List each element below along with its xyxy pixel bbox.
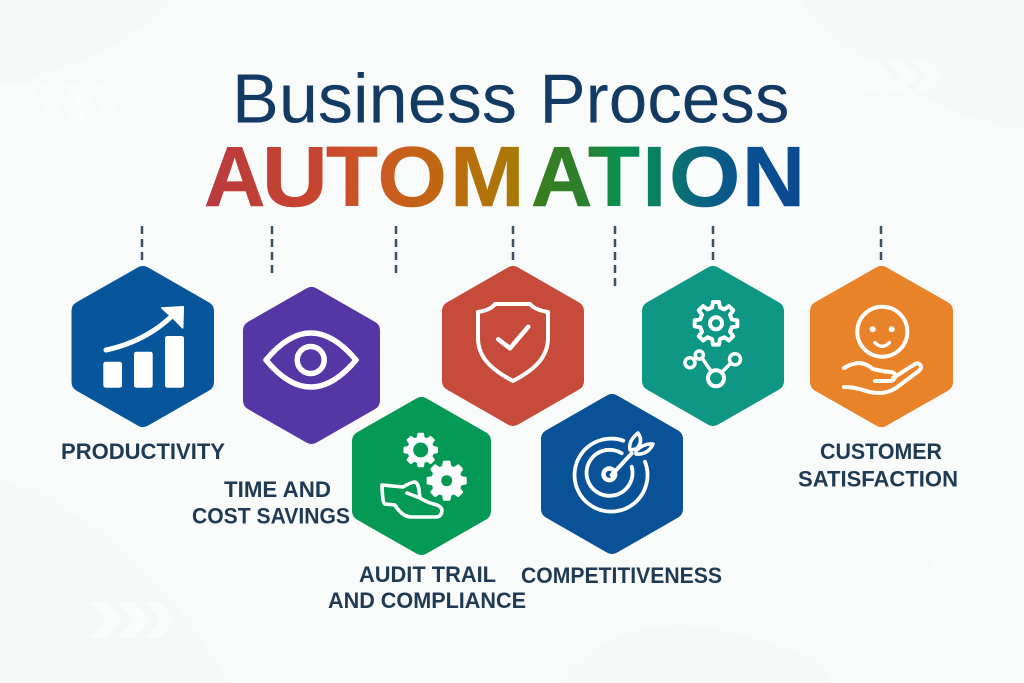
hexagon: audit trail	[362, 407, 481, 545]
title: AUTOMATION: A	[204, 130, 265, 225]
icon: shield with check	[478, 304, 548, 381]
label: customer satisfaction: CUSTOMER	[820, 439, 942, 464]
hexagon: competitiveness	[551, 404, 673, 544]
hexagon: process automation	[652, 276, 774, 416]
dashed connector lines	[142, 226, 881, 288]
icon: gear and network	[685, 302, 740, 386]
label: time and cost savings: COST SAVINGS	[192, 504, 350, 528]
icon: eye	[266, 333, 356, 387]
panel: productivity	[61, 276, 225, 464]
label: customer satisfaction: SATISFACTION	[798, 466, 958, 492]
title: Business Process: Business	[232, 60, 517, 138]
title: AUTOMATION: M	[450, 130, 524, 225]
title: AUTOMATION: T	[326, 130, 378, 225]
title: AUTOMATION: O	[378, 130, 447, 225]
icon: hand with gears	[382, 434, 466, 517]
hexagon: productivity	[82, 276, 204, 417]
panel: compliance shield	[452, 276, 574, 416]
label: time and cost savings: TIME AND	[224, 477, 331, 502]
hexagon: customer satisfaction	[820, 276, 943, 417]
title: AUTOMATION: N	[742, 130, 805, 225]
label: audit trail and compliance: AND COMPLIANCE	[328, 588, 526, 613]
title: AUTOMATION: I	[642, 130, 666, 225]
title: AUTOMATION: T	[588, 130, 640, 225]
icon: growth chart	[103, 307, 184, 388]
title: AUTOMATION: A	[531, 130, 592, 225]
label: competitiveness: COMPETITIVENESS	[521, 563, 722, 588]
panel: customer satisfaction	[798, 276, 958, 492]
panel: audit trail and compliance	[328, 407, 526, 613]
icon: smiley on hand	[844, 307, 921, 393]
title: Business Process: Process	[540, 60, 790, 138]
label: productivity: PRODUCTIVITY	[61, 439, 225, 464]
title: AUTOMATION: U	[262, 130, 328, 225]
hexagon: shield	[452, 276, 574, 416]
panel: process automation	[652, 276, 774, 416]
panel: time and cost savings	[192, 297, 370, 528]
panel: competitiveness	[521, 404, 722, 588]
title: AUTOMATION: O	[669, 130, 740, 225]
label: audit trail and compliance: AUDIT TRAIL	[359, 562, 496, 587]
hexagon: time and cost savings	[253, 297, 370, 434]
icon: target with arrow	[575, 433, 653, 512]
